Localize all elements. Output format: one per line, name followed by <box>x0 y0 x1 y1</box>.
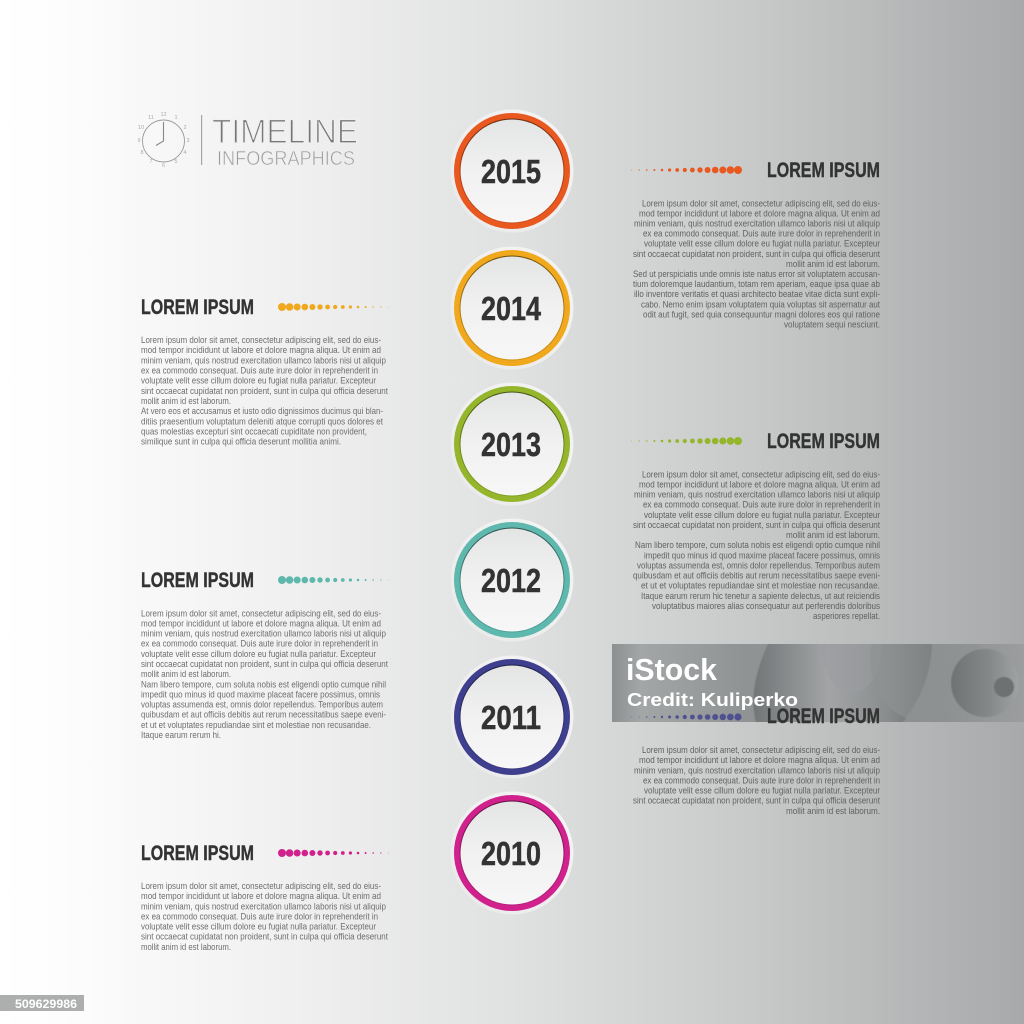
text block: 2012: minim veniam, quis nostrud exercitation ullamco laboris nisi ut aliquip <box>141 629 386 639</box>
text block: 2013: mollit anim id est laborum. <box>786 530 880 540</box>
text block: 2013: mod tempor incididunt ut labore et dolore magna aliqua. Ut enim ad <box>639 479 880 489</box>
year circle 2013 <box>450 382 574 506</box>
text block: 2013: voluptatibus maiores alias consequatur aut perferendis doloribus <box>652 601 881 611</box>
text block: 2013: Lorem ipsum dolor sit amet, consectetur adipiscing elit, sed do eius- <box>642 469 880 479</box>
text block: 2011: minim veniam, quis nostrud exercitation ullamco laboris nisi ut aliquip <box>634 765 880 775</box>
text block: 2012: voluptate velit esse cillum dolore eu fugiat nulla pariatur. Excepteur <box>141 649 376 659</box>
image id tag: 509629986 <box>15 997 77 1011</box>
text block: 2014: minim veniam, quis nostrud exercitation ullamco laboris nisi ut aliquip <box>141 355 386 365</box>
text block: 2015: voluptatem sequi nesciunt. <box>784 320 880 330</box>
year circle 2014: 2014 <box>481 290 542 327</box>
icon: clock: 2 <box>183 125 187 131</box>
heading: 2013: LOREM IPSUM <box>767 430 880 453</box>
text block: 2010: voluptate velit esse cillum dolore eu fugiat nulla pariatur. Excepteur <box>141 922 376 932</box>
text block: 2014: quas molestias excepturi sint occaecati cupiditate non provident, <box>141 426 367 436</box>
text block: 2013 <box>633 469 881 621</box>
icon: clock: 7 <box>149 159 153 165</box>
text block: 2012 <box>141 608 388 740</box>
icon: clock: 9 <box>137 138 141 144</box>
text block: 2012: et ut et voluptates repudiandae sint et molestiae non recusandae. <box>141 720 371 730</box>
text block: 2013: Nam libero tempore, cum soluta nobis est eligendi optio cumque nihil <box>635 540 880 550</box>
dots: 2010 <box>278 849 389 857</box>
year circle 2014 <box>450 246 574 370</box>
text block: 2015: Lorem ipsum dolor sit amet, consectetur adipiscing elit, sed do eius- <box>642 198 880 208</box>
text block: 2014: At vero eos et accusamus et iusto odio dignissimos ducimus qui blan- <box>141 406 383 416</box>
icon: clock: 8 <box>140 150 144 156</box>
heading: 2010: LOREM IPSUM <box>141 842 254 865</box>
year circle 2015: 2015 <box>481 153 541 190</box>
text block: 2012: Lorem ipsum dolor sit amet, consectetur adipiscing elit, sed do eius- <box>141 608 381 618</box>
text block: 2014: voluptate velit esse cillum dolore eu fugiat nulla pariatur. Excepteur <box>141 376 376 386</box>
text block: 2015: odit aut fugit, sed quia consequuntur magni dolores eos qui ratione <box>643 309 880 319</box>
year circle 2010 <box>450 792 574 914</box>
text block: 2011: ex ea commodo consequat. Duis aute irure dolor in reprehenderit in <box>643 775 880 785</box>
text block: 2010: mod tempor incididunt ut labore et dolore magna aliqua. Ut enim ad <box>141 891 381 901</box>
icon: clock: 6 <box>162 163 165 169</box>
dots: 2014 <box>278 303 389 311</box>
year circle 2010: 2010 <box>481 835 541 872</box>
text block: 2011 <box>633 745 880 816</box>
text block: 2015: sint occaecat cupidatat non proident, sunt in culpa qui officia deserunt <box>633 249 880 259</box>
text block: 2012: quibusdam et aut officiis debitis aut rerum necessitatibus saepe eveni- <box>141 710 386 720</box>
dots: 2015 <box>631 166 742 174</box>
text block: 2015: mollit anim id est laborum. <box>786 259 880 269</box>
logo title: TIMELINE <box>212 113 358 151</box>
text block: 2013: ex ea commodo consequat. Duis aute irure dolor in reprehenderit in <box>643 500 880 510</box>
timeline circles <box>450 110 574 914</box>
text block: 2011: Lorem ipsum dolor sit amet, consectetur adipiscing elit, sed do eius- <box>642 745 880 755</box>
text block: 2013: minim veniam, quis nostrud exercitation ullamco laboris nisi ut aliquip <box>634 490 880 500</box>
text block: 2012: sint occaecat cupidatat non proident, sunt in culpa qui officia deserunt <box>141 659 388 669</box>
text block: 2013: voluptate velit esse cillum dolore eu fugiat nulla pariatur. Excepteur <box>644 510 880 520</box>
text block: 2012: mod tempor incididunt ut labore et dolore magna aliqua. Ut enim ad <box>141 618 381 628</box>
text block: 2014: sint occaecat cupidatat non proident, sunt in culpa qui officia deserunt <box>141 386 388 396</box>
text block: 2015: voluptate velit esse cillum dolore eu fugiat nulla pariatur. Excepteur <box>644 239 880 249</box>
watermark logo text: iStock <box>626 652 718 687</box>
icon: clock: 12 <box>160 112 167 118</box>
text block: 2012: Itaque earum rerum hi. <box>141 730 221 740</box>
text block: 2013: sint occaecat cupidatat non proident, sunt in culpa qui officia deserunt <box>633 520 880 530</box>
text block: 2013: voluptas assumenda est, omnis dolor repellendus. Temporibus autem <box>637 560 880 570</box>
text block: 2011: mollit anim id est laborum. <box>786 806 880 816</box>
image id tag <box>0 995 84 1011</box>
text block: 2015: tium doloremque laudantium, totam rem aperiam, eaque ipsa quae ab <box>633 279 880 289</box>
dots: 2012 <box>278 576 389 584</box>
text block: 2010: ex ea commodo consequat. Duis aute irure dolor in reprehenderit in <box>141 911 378 921</box>
text block: 2015: cabo. Nemo enim ipsam voluptatem quia voluptas sit aspernatur aut <box>641 299 880 309</box>
icon: clock: 1 <box>174 115 178 121</box>
dots: 2013 <box>631 437 742 445</box>
icon: clock: 5 <box>174 159 178 165</box>
text block: 2013: asperiores repellat. <box>813 611 880 621</box>
dots: 2011 <box>631 713 742 721</box>
text block: 2014: similique sunt in culpa qui officia deserunt mollitia animi. <box>141 437 341 447</box>
text block: 2013: Itaque earum rerum hic tenetur a sapiente delectus, ut aut reiciendis <box>641 591 881 601</box>
watermark banner <box>612 644 1024 724</box>
text block: 2015: ex ea commodo consequat. Duis aute irure dolor in reprehenderit in <box>643 229 880 239</box>
heading: 2015: LOREM IPSUM <box>767 159 880 182</box>
text block: 2012: impedit quo minus id quod maxime placeat facere possimus, omnis <box>141 689 381 699</box>
text block: 2010: minim veniam, quis nostrud exercitation ullamco laboris nisi ut aliquip <box>141 901 386 911</box>
text block: 2010 <box>141 881 388 952</box>
logo divider <box>201 115 202 165</box>
heading: 2012: LOREM IPSUM <box>141 569 254 592</box>
text block: 2014: ex ea commodo consequat. Duis aute irure dolor in reprehenderit in <box>141 366 378 376</box>
text block: 2012: Nam libero tempore, cum soluta nobis est eligendi optio cumque nihil <box>141 679 386 689</box>
text block: 2015 <box>633 198 880 330</box>
year circle 2013: 2013 <box>481 426 541 463</box>
watermark credit text: Credit: Kuliperko <box>627 690 798 710</box>
text block: 2014 <box>141 335 388 447</box>
year circle 2015 <box>450 110 574 232</box>
heading: 2011: LOREM IPSUM <box>767 705 880 728</box>
text block: 2015: Sed ut perspiciatis unde omnis iste natus error sit voluptatem accusan- <box>633 269 880 279</box>
text block: 2012: voluptas assumenda est, omnis dolor repellendus. Temporibus autem <box>141 700 383 710</box>
text block: 2013: impedit quo minus id quod maxime placeat facere possimus, omnis <box>644 550 881 560</box>
logo subtitle: INFOGRAPHICS <box>217 148 355 170</box>
text block: 2015: minim veniam, quis nostrud exercitation ullamco laboris nisi ut aliquip <box>634 218 880 228</box>
icon: clock: 3 <box>186 138 190 144</box>
heading: 2014: LOREM IPSUM <box>141 296 254 319</box>
text block: 2013: quibusdam et aut officiis debitis aut rerum necessitatibus saepe eveni- <box>633 571 880 581</box>
logo: timeline infographics <box>137 112 358 170</box>
text block: 2015: illo inventore veritatis et quasi architecto beatae vitae dicta sunt expli- <box>634 289 880 299</box>
text block: 2014: mollit anim id est laborum. <box>141 396 231 406</box>
text block: 2012: ex ea commodo consequat. Duis aute irure dolor in reprehenderit in <box>141 639 378 649</box>
text block: 2011: mod tempor incididunt ut labore et dolore magna aliqua. Ut enim ad <box>639 755 880 765</box>
year circle 2011: 2011 <box>481 699 541 736</box>
text block: 2015: mod tempor incididunt ut labore et dolore magna aliqua. Ut enim ad <box>639 208 880 218</box>
text block: 2013: et ut et voluptates repudiandae sint et molestiae non recusandae. <box>641 581 880 591</box>
icon: clock: 4 <box>183 150 187 156</box>
year circle 2012: 2012 <box>481 562 541 599</box>
year circle 2011 <box>450 656 574 778</box>
icon: clock: 11 <box>148 115 154 121</box>
text block: 2012: mollit anim id est laborum. <box>141 669 231 679</box>
icon: clock: 10 <box>138 125 144 131</box>
text block: 2011: sint occaecat cupidatat non proident, sunt in culpa qui officia deserunt <box>633 796 880 806</box>
text block: 2010: mollit anim id est laborum. <box>141 942 231 952</box>
text block: 2014: mod tempor incididunt ut labore et dolore magna aliqua. Ut enim ad <box>141 345 381 355</box>
text block: 2014: ditiis praesentium voluptatum deleniti atque corrupti quos dolores et <box>141 416 384 426</box>
year circle 2012 <box>450 518 574 642</box>
text block: 2011: voluptate velit esse cillum dolore eu fugiat nulla pariatur. Excepteur <box>644 786 880 796</box>
text block: 2014: Lorem ipsum dolor sit amet, consectetur adipiscing elit, sed do eius- <box>141 335 381 345</box>
text block: 2010: sint occaecat cupidatat non proident, sunt in culpa qui officia deserunt <box>141 932 388 942</box>
icon: clock <box>137 112 190 169</box>
text block: 2010: Lorem ipsum dolor sit amet, consectetur adipiscing elit, sed do eius- <box>141 881 381 891</box>
